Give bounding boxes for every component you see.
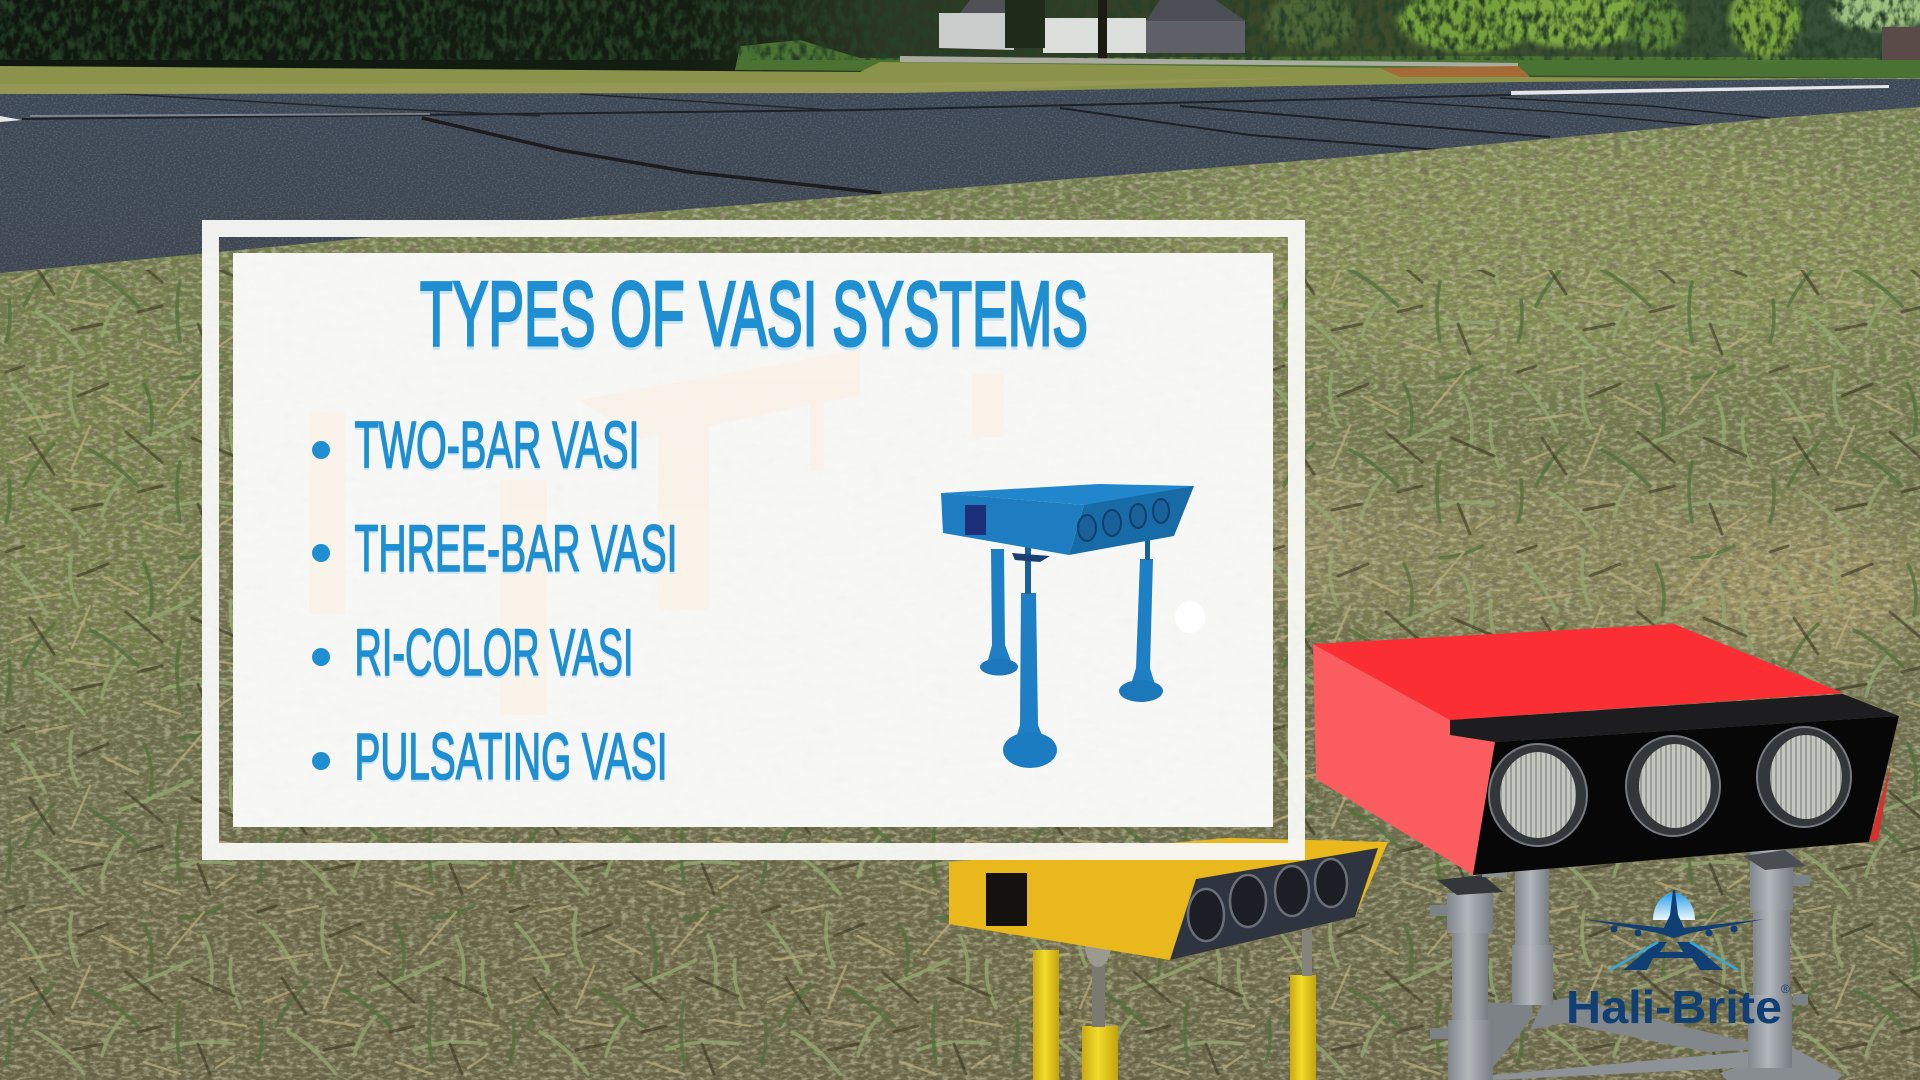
list item: Ri-Color VASI: RI-COLOR VASI (354, 617, 634, 691)
blue unit lamps (1078, 499, 1169, 541)
red unit lamps (1489, 727, 1851, 846)
stand bolts (1430, 875, 1810, 1039)
background photo: tree line and houses (0, 0, 1920, 78)
stand legs (1452, 933, 1488, 1023)
ghost VASI watermark (309, 349, 1004, 715)
background photo: far grass strip (0, 62, 1830, 94)
lawn behind road (735, 40, 1920, 78)
yellow unit lamps (1188, 859, 1347, 941)
logo light beam (1653, 893, 1695, 920)
black lamp face (1473, 716, 1899, 875)
white dot (1175, 601, 1205, 633)
stand braces (1493, 1051, 1755, 1080)
list item: Ri-Color VASI: RI-COLOR VASI (354, 615, 634, 689)
black visor (1450, 694, 1899, 742)
blue unit housing (941, 484, 1194, 505)
logo wordmark: Hali-Brite (1566, 981, 1782, 1033)
list item: Pulsating VASI (312, 719, 668, 795)
icon: blue VASI unit (941, 484, 1194, 768)
list item: Three-Bar VASI: THREE-BAR VASI (354, 511, 678, 585)
yellow unit dark lamp face (1170, 848, 1378, 960)
grey house (1146, 20, 1245, 53)
garage (1043, 18, 1146, 53)
yellow unit housing (949, 838, 1388, 960)
white house (939, 13, 1014, 50)
list item: Pulsating VASI: PULSATING VASI (354, 719, 668, 793)
list item: Two-Bar VASI: TWO-BAR VASI (354, 410, 640, 484)
panel: white frame and content card (202, 220, 1305, 860)
logo runway lines (1610, 942, 1738, 970)
list item: Two-Bar VASI: TWO-BAR VASI (354, 408, 640, 482)
stand plates (1437, 875, 1503, 895)
red sliver right of lamp face (1869, 716, 1899, 842)
bright tree foliage (1265, 0, 1920, 58)
blue unit dark square (965, 505, 986, 535)
heading: TYPES OF VASI SYSTEMS (420, 267, 1088, 368)
blue unit legs (980, 534, 1163, 768)
logo registered mark: ® (1781, 982, 1790, 996)
yellow unit black square (986, 873, 1027, 926)
heading: TYPES OF VASI SYSTEMS (420, 264, 1088, 365)
card grass texture (233, 253, 1273, 827)
access road (900, 56, 1518, 67)
red unit side face (1313, 644, 1495, 875)
yellow VASI unit (behind frame) (949, 838, 1388, 1080)
list item: Two-Bar VASI (312, 408, 640, 484)
list item: Three-Bar VASI (312, 511, 678, 587)
yellow unit legs (1033, 917, 1316, 1080)
red and black VASI unit (1313, 624, 1899, 1080)
logo runway A (1623, 942, 1723, 970)
red unit steel stand (1430, 850, 1843, 1080)
background photo: runway asphalt (0, 79, 1920, 273)
bullet list (312, 408, 678, 795)
white outer frame (202, 220, 1305, 860)
blue unit bracket (1012, 553, 1050, 562)
logo airplane (1583, 890, 1765, 938)
far building (1882, 27, 1920, 60)
list item: Pulsating VASI: PULSATING VASI (354, 721, 668, 795)
red unit top face (1313, 624, 1843, 720)
stand base plate (1720, 1047, 1843, 1080)
list item: Ri-Color VASI (312, 615, 634, 691)
heading (420, 264, 1088, 368)
logo: Hali-Brite (1566, 890, 1790, 1033)
list item: Three-Bar VASI: THREE-BAR VASI (354, 513, 678, 587)
dirt bank (1375, 66, 1530, 77)
translucent content card (233, 253, 1273, 827)
